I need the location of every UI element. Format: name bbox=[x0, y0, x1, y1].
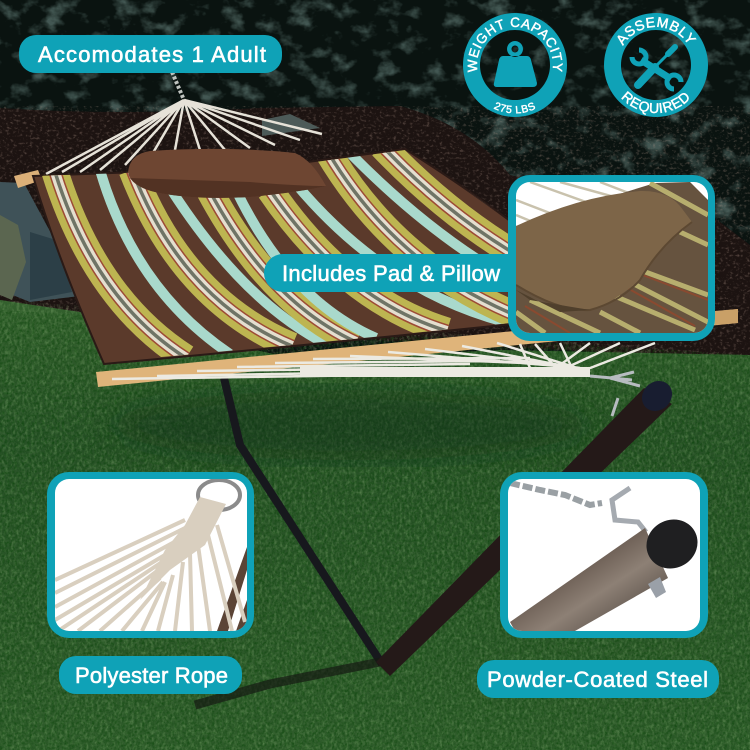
badge: assembly required: REQUIRED bbox=[621, 91, 689, 115]
callout: polyester rope: Polyester Rope bbox=[75, 663, 228, 688]
callout: powder-coated steel: Powder-Coated Steel bbox=[487, 667, 708, 692]
stand: upright pole bbox=[376, 388, 672, 676]
distant stone bbox=[262, 114, 320, 136]
badge: assembly required bbox=[604, 13, 708, 117]
icon: weight bbox=[494, 41, 537, 87]
badge: weight capacity: WEIGHT CAPACITY bbox=[467, 17, 563, 72]
callout: includes pad and pillow bbox=[264, 254, 510, 292]
chain and hook bbox=[590, 372, 640, 416]
stand: pole cap bbox=[636, 375, 678, 417]
upper rope fan bbox=[46, 100, 322, 174]
lower rope fan bbox=[112, 343, 655, 379]
callout: powder-coated steel bbox=[477, 660, 719, 698]
badge: weight capacity: 275 LBS bbox=[494, 102, 536, 114]
panel: steel pole detail bbox=[500, 472, 708, 638]
callout: accomodates 1 adult: Accomodates 1 Adult bbox=[38, 42, 266, 67]
badge: weight capacity bbox=[463, 13, 567, 117]
upper spreader bar stub bbox=[14, 170, 42, 188]
stand: thin support bbox=[224, 378, 382, 664]
callout: polyester rope bbox=[59, 656, 242, 694]
callout: accomodates 1 adult bbox=[19, 35, 282, 73]
pillow bbox=[128, 149, 326, 198]
icon: wrench and screwdriver bbox=[632, 47, 681, 89]
panel: pad and pillow detail bbox=[508, 175, 715, 341]
hammock pad bbox=[33, 146, 522, 364]
lower spreader bar bbox=[96, 309, 738, 387]
rock bbox=[0, 182, 80, 302]
badge: assembly required: ASSEMBLY bbox=[617, 16, 697, 46]
panel: rope detail bbox=[47, 472, 254, 638]
stand: base shadow bbox=[195, 662, 380, 705]
far pole and chain bbox=[172, 72, 184, 100]
callout: includes pad and pillow: Includes Pad & Pillow bbox=[282, 261, 500, 286]
